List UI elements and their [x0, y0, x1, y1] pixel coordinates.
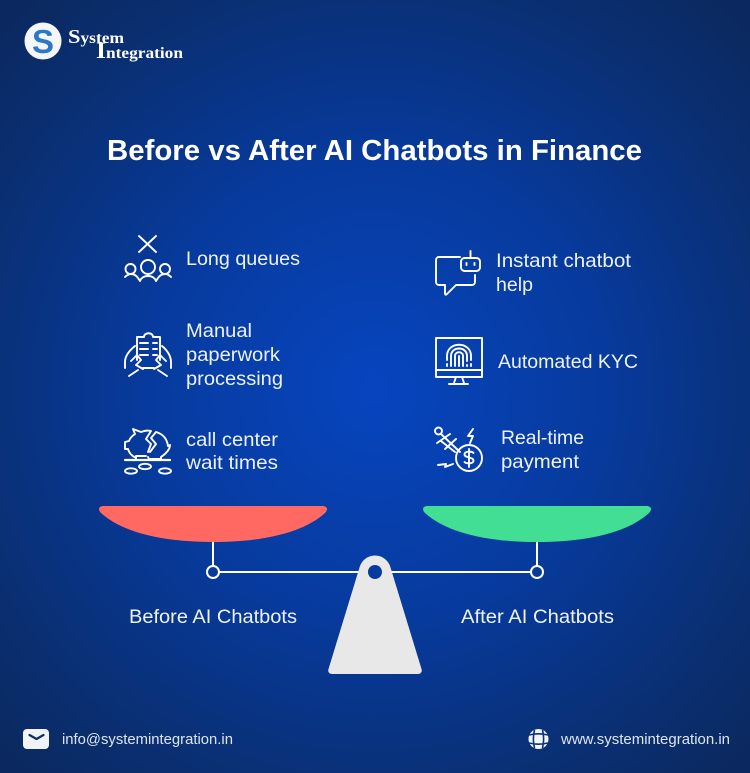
text: automated KYC: Automated KYC: [498, 351, 638, 373]
text: manual paperwork processing: [186, 320, 283, 390]
footer: website: [528, 729, 730, 749]
label: after: After AI Chatbots: [461, 606, 614, 628]
text: manual paperwork processing: paperwork: [186, 344, 280, 366]
logo: System Integration: System: [68, 26, 124, 48]
icon: real-time payment: [435, 428, 482, 471]
text: instant chatbot help: Instant chatbot: [496, 250, 632, 272]
label: before: Before AI Chatbots: [129, 606, 297, 628]
icon: fingerprint monitor: [436, 338, 482, 384]
text: long queues: Long queues: [186, 248, 300, 270]
text: instant chatbot help: [496, 250, 632, 296]
before column: [125, 236, 300, 474]
text: manual paperwork processing: Manual: [186, 320, 252, 342]
balance scale: [99, 506, 651, 674]
logo: System Integration: S: [32, 23, 54, 60]
text: real-time payment: Real-time: [501, 427, 584, 449]
beam and hangers: [207, 542, 543, 578]
title: Before vs After AI Chatbots in Finance: [107, 135, 642, 167]
text: manual paperwork processing: processing: [186, 368, 283, 390]
pivot: [368, 565, 382, 579]
text: real-time payment: payment: [501, 451, 580, 473]
after column: [435, 250, 638, 473]
logo: System Integration: [24, 22, 183, 63]
footer: email: [23, 729, 233, 749]
text: call center wait times: call center: [186, 429, 279, 451]
text: real-time payment: [501, 427, 584, 473]
text: instant chatbot help: help: [496, 274, 533, 296]
right pan: green: [423, 506, 651, 542]
icon: chatbot: [436, 251, 480, 295]
icon: manual paperwork: [125, 333, 171, 376]
logo: System Integration: Integration: [96, 38, 183, 63]
icon: broken piggy bank: [125, 429, 171, 474]
icon: long queues: [125, 236, 171, 281]
footer: website: www.systemintegration.in: [560, 732, 730, 748]
left pan: red: [99, 506, 327, 542]
text: call center wait times: [185, 429, 279, 474]
footer: email: info@systemintegration.in: [62, 732, 233, 748]
fulcrum: [328, 555, 422, 674]
text: call center wait times: wait times: [185, 452, 278, 474]
